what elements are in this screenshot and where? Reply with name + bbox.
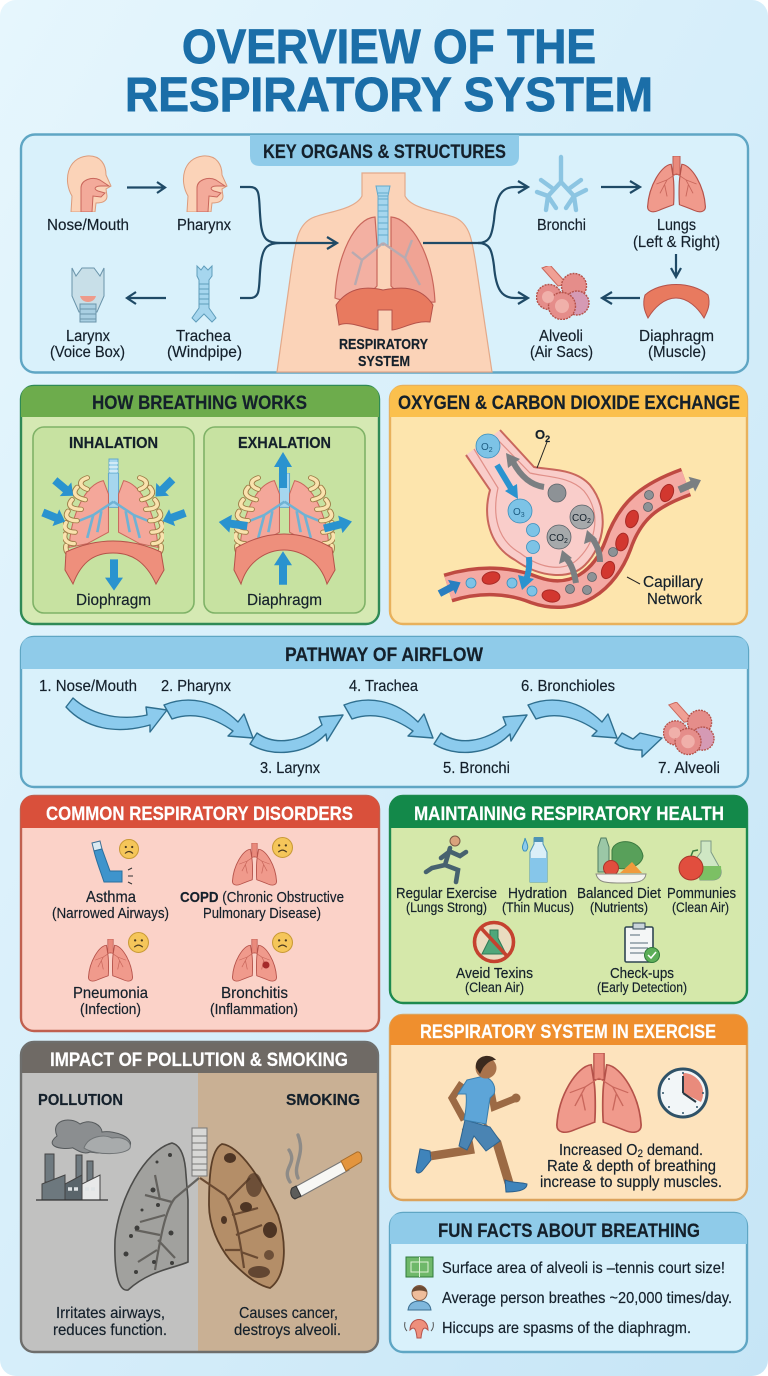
heading: exercise xyxy=(390,1015,747,1045)
molecule labels: O xyxy=(481,442,489,453)
disorder: bronchitis: (Inflammation) xyxy=(210,1001,298,1018)
heading: fun facts xyxy=(390,1213,747,1244)
tip: balanced diet: (Nutrients) xyxy=(590,900,648,915)
label: trachea: Trachea xyxy=(176,328,231,345)
disorder: COPD xyxy=(180,838,344,922)
panel: how breathing works xyxy=(21,386,379,624)
breathing arrows, exhalation xyxy=(217,452,354,585)
molecule labels: 2 xyxy=(489,447,493,454)
label: larynx xyxy=(50,328,125,361)
fact: breaths per day: Average person breathes ~20,000 times/day. xyxy=(442,1290,732,1307)
text: exercise effects: Rate & depth of breathing xyxy=(547,1158,716,1175)
icon: lungs xyxy=(557,1053,641,1132)
icon: water bottle xyxy=(522,837,547,882)
label: pharynx: Pharynx xyxy=(177,217,231,234)
label: alveoli: Alveoli xyxy=(539,328,583,345)
icon: factory xyxy=(36,1120,131,1200)
capillary network xyxy=(448,482,686,594)
heading: disorders: COMMON RESPIRATORY DISORDERS xyxy=(46,803,353,825)
tip: regular exercise xyxy=(396,836,497,915)
text: pollution effects xyxy=(53,1305,167,1339)
label: capillary network: Network xyxy=(647,591,703,608)
lungs and rib cage, exhaled xyxy=(234,473,335,584)
label: alveoli: (Air Sacs) xyxy=(530,344,593,361)
tip: regular exercise: Regular Exercise xyxy=(396,885,497,902)
arrows between organs xyxy=(127,181,681,304)
panel: maintaining respiratory health xyxy=(390,796,747,1003)
lungs and rib cage, inhaled xyxy=(65,459,164,584)
label: O2: O xyxy=(535,427,545,442)
pathway steps: 2. Pharynx xyxy=(161,678,231,695)
label: respiratory system xyxy=(339,336,428,370)
label: trachea: (Windpipe) xyxy=(167,344,242,361)
label: larynx: Larynx xyxy=(66,328,110,345)
label: respiratory system: SYSTEM xyxy=(358,353,410,370)
fact: alveoli surface area: Surface area of alveoli is –tennis court size! xyxy=(442,1260,725,1277)
breathing arrows, inhalation xyxy=(40,473,188,591)
pathway steps: 4. Trachea xyxy=(349,678,418,695)
label: O2 xyxy=(535,427,550,468)
title: RESPIRATORY SYSTEM xyxy=(125,69,653,122)
heading: pathway xyxy=(21,637,748,669)
icon: no toxins xyxy=(474,922,514,962)
icon: sad face xyxy=(120,840,138,858)
icon: hiccup diaphragm xyxy=(405,1320,433,1338)
heading: pathway: PATHWAY OF AIRFLOW xyxy=(285,644,484,666)
molecule labels: CO xyxy=(572,513,587,524)
disorder: pneumonia xyxy=(73,933,148,1018)
text: exercise effects: 2 xyxy=(637,1148,643,1160)
icon: alveoli xyxy=(663,702,714,755)
molecule labels: CO xyxy=(549,533,564,544)
disorder: bronchitis xyxy=(210,933,298,1018)
panel: respiratory system in exercise xyxy=(390,1015,747,1200)
icon: pharynx xyxy=(183,156,227,212)
text: pollution effects: Irritates airways, xyxy=(56,1305,165,1322)
icon: bronchi xyxy=(537,157,586,210)
heading: health xyxy=(390,796,747,828)
text: smoking effects: destroys alveoli. xyxy=(234,1322,341,1339)
red blood cells xyxy=(481,482,676,603)
icon: trachea xyxy=(192,266,216,322)
tip: balanced diet: Balanced Diet xyxy=(577,885,662,902)
text: smoking effects xyxy=(234,1305,341,1339)
gas molecules xyxy=(466,434,654,596)
panel: common respiratory disorders xyxy=(21,796,379,1031)
pathway steps xyxy=(39,678,720,777)
heading: health: MAINTAINING RESPIRATORY HEALTH xyxy=(414,803,724,825)
tip: regular exercise: (Lungs Strong) xyxy=(406,900,487,915)
icon: tennis court xyxy=(406,1257,433,1277)
sub-panel: inhalation: INHALATION xyxy=(69,435,158,452)
title xyxy=(125,21,653,122)
heading: fun facts: FUN FACTS ABOUT BREATHING xyxy=(438,1220,700,1242)
label: diaphragm xyxy=(639,328,714,361)
alveolus illustration xyxy=(466,430,603,575)
label: bronchi: Bronchi xyxy=(537,217,586,234)
icon: apple and flask xyxy=(679,841,721,880)
icon: person xyxy=(408,1286,431,1310)
text: pollution effects: reduces function. xyxy=(53,1322,167,1339)
icon: alveoli xyxy=(536,265,589,320)
icon: larynx xyxy=(72,268,104,322)
molecule labels: 3 xyxy=(521,512,525,519)
heading: impact: IMPACT OF POLLUTION & SMOKING xyxy=(50,1049,348,1071)
disorder: asthma: Asthma xyxy=(86,889,136,906)
heading: key organs xyxy=(250,135,519,166)
label: diaphragm: Diaphragm xyxy=(639,328,714,345)
sub-panel: inhalation xyxy=(33,427,194,613)
sub-panel: exhalation xyxy=(204,427,365,613)
heading: key organs: KEY ORGANS & STRUCTURES xyxy=(263,141,506,163)
title: OVERVIEW OF THE xyxy=(182,21,596,74)
heading: disorders xyxy=(21,796,379,828)
icon: clipboard xyxy=(625,923,660,962)
label: alveoli xyxy=(530,328,593,361)
disorder: asthma: (Narrowed Airways) xyxy=(52,905,169,922)
disorder: asthma xyxy=(52,840,169,922)
icon: diaphragm xyxy=(644,284,709,318)
fact: hiccups: Hiccups are spasms of the diaphragm. xyxy=(442,1320,691,1337)
tip: pommunies xyxy=(667,841,736,915)
label: pollution: POLLUTION xyxy=(38,1092,123,1109)
text: exercise effects: increase to supply muscles. xyxy=(540,1174,722,1191)
disorder: COPD: COPD (Chronic Obstructive xyxy=(180,889,344,906)
tip: pommunies: Pommunies xyxy=(667,885,736,902)
molecule labels: O xyxy=(513,507,521,518)
heading: impact xyxy=(21,1042,378,1073)
pathway steps: 1. Nose/Mouth xyxy=(39,678,137,695)
text: exercise effects xyxy=(540,1142,722,1191)
label: larynx: (Voice Box) xyxy=(50,344,125,361)
polluted lung xyxy=(115,1128,207,1290)
text: exercise effects: demand. xyxy=(643,1142,703,1159)
tip: check-ups: (Early Detection) xyxy=(597,980,687,995)
label: diaphragm: (Muscle) xyxy=(648,344,706,361)
tip: hydration: (Thin Mucus) xyxy=(502,900,574,915)
pathway steps: 7. Alveoli xyxy=(658,760,720,777)
label: O2: 2 xyxy=(545,434,550,444)
disorder: pneumonia: (Infection) xyxy=(80,1001,141,1018)
tip: balanced diet xyxy=(577,838,662,915)
icon: lungs xyxy=(648,156,705,212)
molecule labels: 2 xyxy=(564,538,568,545)
label: lungs: (Left & Right) xyxy=(633,234,720,251)
flow arrows xyxy=(66,698,662,757)
text: exercise effects: Increased O xyxy=(559,1142,646,1159)
panel: impact of pollution and smoking xyxy=(21,1042,378,1352)
label: smoking: SMOKING xyxy=(286,1092,360,1109)
icon: runner xyxy=(426,836,466,882)
central torso illustration xyxy=(277,173,492,372)
icon: cigarette xyxy=(287,1135,362,1199)
molecule labels xyxy=(481,442,591,545)
exchange arrows xyxy=(436,453,704,601)
molecule labels: 2 xyxy=(587,518,591,525)
label: respiratory system: RESPIRATORY xyxy=(339,336,428,353)
icon: inhaler xyxy=(92,841,133,884)
icon: nose/mouth xyxy=(67,156,111,212)
heading: gas exchange xyxy=(390,386,747,417)
panel: pathway of airflow xyxy=(21,637,748,787)
label: capillary network: Capillary xyxy=(643,574,703,591)
pathway steps: 5. Bronchi xyxy=(443,760,510,777)
text: smoking effects: Causes cancer, xyxy=(239,1305,338,1322)
tip: avoid toxins: Aveid Texins xyxy=(456,965,533,982)
sub-panel: exhalation: EXHALATION xyxy=(238,435,331,452)
icon: runner xyxy=(416,1056,527,1192)
label: lungs: Lungs xyxy=(657,217,696,234)
icon: food bowl xyxy=(596,838,646,883)
tip: check-ups xyxy=(597,923,687,995)
smoker lung xyxy=(200,1144,284,1288)
disorder: bronchitis: Bronchitis xyxy=(221,985,288,1002)
tip: avoid toxins xyxy=(456,922,533,995)
tip: hydration: Hydration xyxy=(508,885,567,902)
pathway steps: 3. Larynx xyxy=(260,760,320,777)
label: lungs xyxy=(633,217,720,251)
tip: avoid toxins: (Clean Air) xyxy=(465,980,524,995)
label: diaphragm, inhalation: Diophragm xyxy=(76,592,151,609)
heading: how breathing works xyxy=(21,386,379,417)
panel: key organs and structures xyxy=(21,134,748,372)
tip: pommunies: (Clean Air) xyxy=(672,900,729,915)
pathway steps: 6. Bronchioles xyxy=(521,678,615,695)
icon: clock xyxy=(659,1069,707,1117)
panel: fun facts about breathing xyxy=(390,1213,747,1352)
label: trachea xyxy=(167,328,242,361)
disorder: COPD: Pulmonary Disease) xyxy=(203,905,321,922)
panel: oxygen and carbon dioxide exchange xyxy=(390,386,747,624)
tip: hydration xyxy=(502,837,574,915)
disorder: pneumonia: Pneumonia xyxy=(73,985,148,1002)
heading: exercise: RESPIRATORY SYSTEM IN EXERCISE xyxy=(420,1021,716,1043)
label: capillary network xyxy=(627,574,703,608)
label: nose/mouth: Nose/Mouth xyxy=(47,217,129,234)
heading: how breathing works: HOW BREATHING WORKS xyxy=(92,392,307,414)
tip: check-ups: Check-ups xyxy=(610,965,674,982)
label: diaphragm, exhalation: Diaphragm xyxy=(247,592,322,609)
